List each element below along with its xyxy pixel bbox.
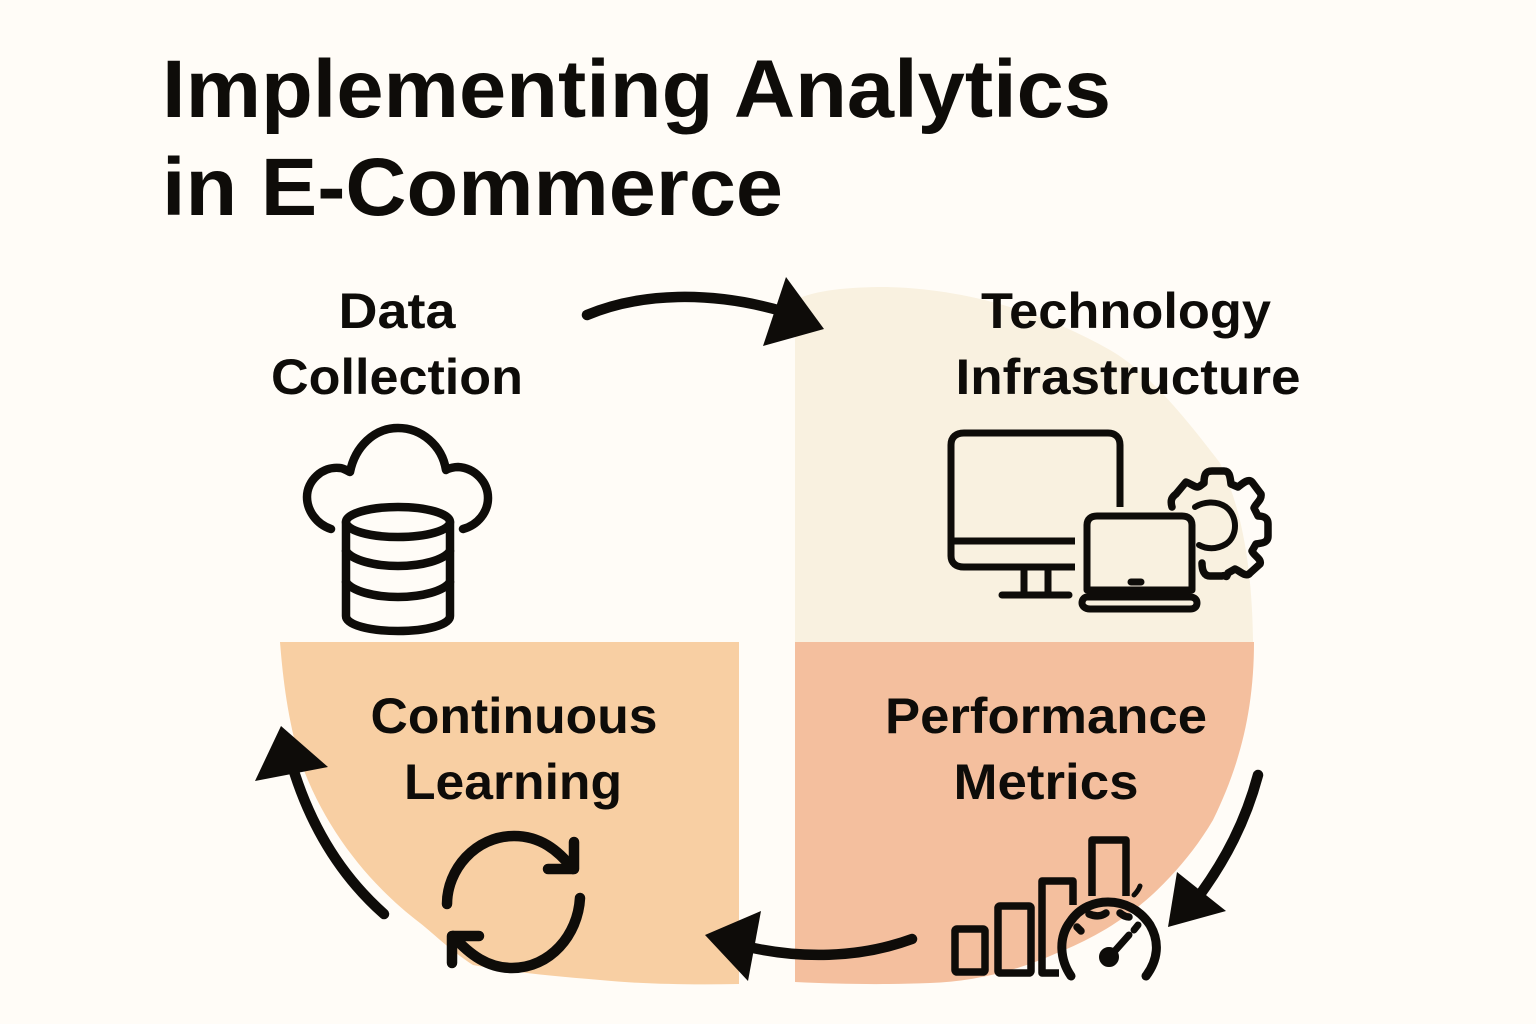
arrow: data collection to technology <box>587 277 824 346</box>
arrow: performance to learning <box>705 911 912 981</box>
label: continuous learning: Learning <box>404 754 622 810</box>
panel: performance metrics background <box>795 642 1254 984</box>
panel: technology infrastructure background <box>795 287 1253 642</box>
label: data collection: Data <box>338 283 457 339</box>
title: in E-Commerce <box>162 142 783 233</box>
icon: monitor, laptop and gear <box>951 433 1268 609</box>
label: technology infrastructure: Technology <box>981 283 1271 339</box>
label: performance metrics <box>885 688 1207 810</box>
icon: refresh arrows <box>447 836 580 968</box>
label: data collection <box>271 283 523 405</box>
arrow: learning to data collection <box>255 726 384 914</box>
label: continuous learning: Continuous <box>370 688 658 744</box>
label: technology infrastructure <box>956 283 1300 405</box>
panel: continuous learning background <box>280 642 739 984</box>
label: data collection: Collection <box>271 349 523 405</box>
title <box>162 44 1111 233</box>
label: continuous learning <box>370 688 658 810</box>
label: performance metrics: Metrics <box>954 754 1138 810</box>
title: Implementing Analytics <box>162 44 1111 135</box>
label: technology infrastructure: Infrastructure <box>956 349 1300 405</box>
label: performance metrics: Performance <box>885 688 1207 744</box>
icon: bar chart and speedometer <box>955 840 1156 976</box>
icon: cloud database <box>307 428 488 631</box>
arrow: technology to performance <box>1168 775 1258 927</box>
